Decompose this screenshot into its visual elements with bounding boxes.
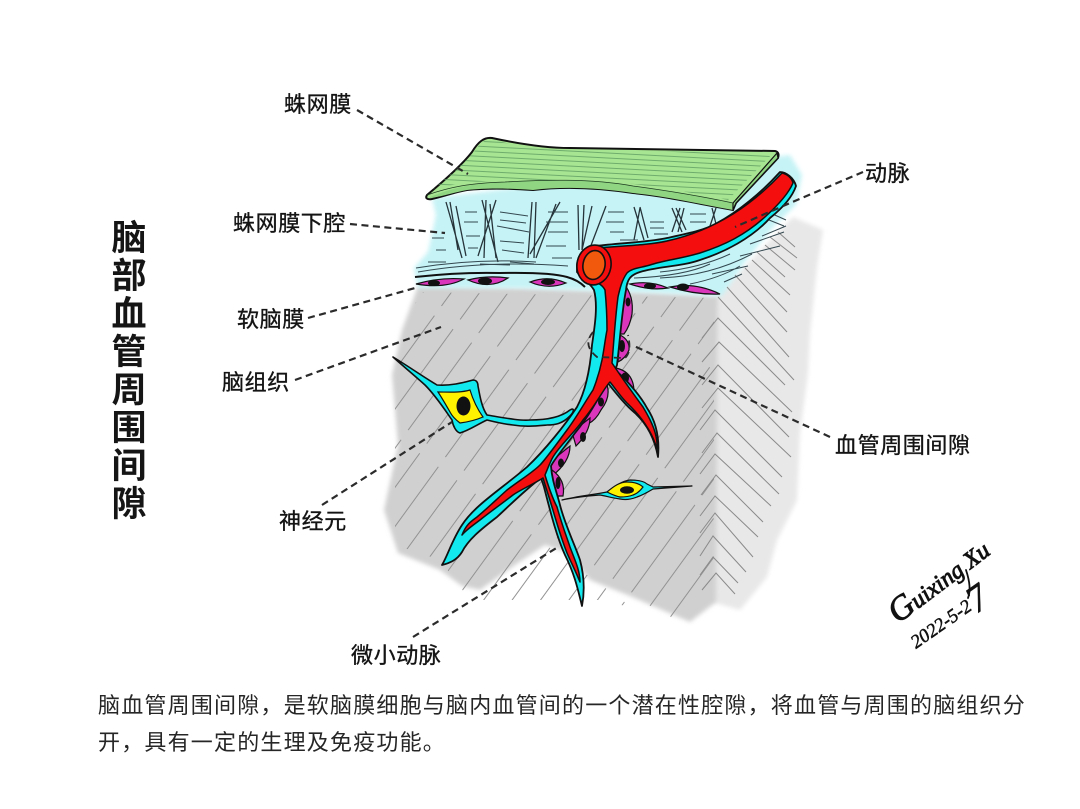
label: 脑组织: 脑组织 bbox=[222, 370, 290, 395]
label: 蛛网膜: 蛛网膜 bbox=[284, 92, 352, 117]
arachnoid membrane bbox=[426, 138, 779, 210]
label: 软脑膜: 软脑膜 bbox=[237, 307, 305, 332]
leader: 血管周围间隙 bbox=[632, 345, 830, 437]
title bbox=[111, 219, 147, 524]
title: 部 bbox=[111, 257, 147, 296]
title: 管 bbox=[111, 333, 147, 372]
leader: 神经元 bbox=[322, 422, 452, 505]
pia mater line bbox=[415, 273, 585, 287]
panel: brain section illustration bbox=[384, 138, 823, 622]
brain tissue: left face bbox=[384, 286, 718, 622]
perivascular space marker bbox=[588, 332, 629, 358]
brain tissue hatching: left bbox=[395, 292, 714, 618]
pia mater cells bbox=[416, 277, 720, 496]
leader: 蛛网膜 bbox=[357, 110, 468, 174]
title: 血 bbox=[111, 295, 147, 334]
description paragraph bbox=[98, 693, 1026, 755]
description paragraph: 脑血管周围间隙，是软脑膜细胞与脑内血管间的一个潜在性腔隙，将血管与周围的脑组织分 bbox=[98, 693, 1026, 718]
blood column bbox=[462, 173, 793, 582]
brain tissue: right face bbox=[712, 217, 823, 610]
signature: 2022-5-2 bbox=[907, 596, 976, 653]
arteriole lumen ring bbox=[574, 242, 614, 288]
subarachnoid fibres bbox=[416, 200, 786, 284]
title: 脑 bbox=[111, 219, 147, 258]
label: 蛛网膜下腔: 蛛网膜下腔 bbox=[233, 211, 346, 236]
neuron: large cell bbox=[393, 357, 573, 433]
brain tissue hatching: right chevrons bbox=[700, 232, 797, 594]
title: 间 bbox=[111, 447, 147, 486]
label: 微小动脉: 微小动脉 bbox=[351, 643, 441, 668]
leader: 微小动脉 bbox=[413, 547, 558, 637]
leader: 动脉 bbox=[735, 172, 863, 227]
leader: 软脑膜 bbox=[308, 288, 415, 318]
title: 周 bbox=[111, 371, 147, 410]
signature bbox=[881, 530, 999, 661]
signature: 7 bbox=[958, 575, 999, 621]
title: 隙 bbox=[111, 485, 147, 524]
leader: 蛛网膜下腔 bbox=[350, 224, 445, 233]
description paragraph: 开，具有一定的生理及免疫功能。 bbox=[98, 730, 446, 755]
label: 神经元: 神经元 bbox=[279, 509, 347, 534]
neuron: small cell bbox=[562, 480, 692, 500]
subarachnoid space background bbox=[414, 155, 802, 296]
leader: 脑组织 bbox=[295, 327, 441, 380]
title: 围 bbox=[111, 409, 147, 448]
label: 动脉: 动脉 bbox=[865, 161, 910, 186]
perivascular space sheath bbox=[442, 172, 796, 606]
artery and penetrating arterioles bbox=[442, 172, 796, 606]
label: 血管周围间隙: 血管周围间隙 bbox=[835, 433, 971, 458]
signature: Guixing Xu bbox=[881, 530, 996, 630]
